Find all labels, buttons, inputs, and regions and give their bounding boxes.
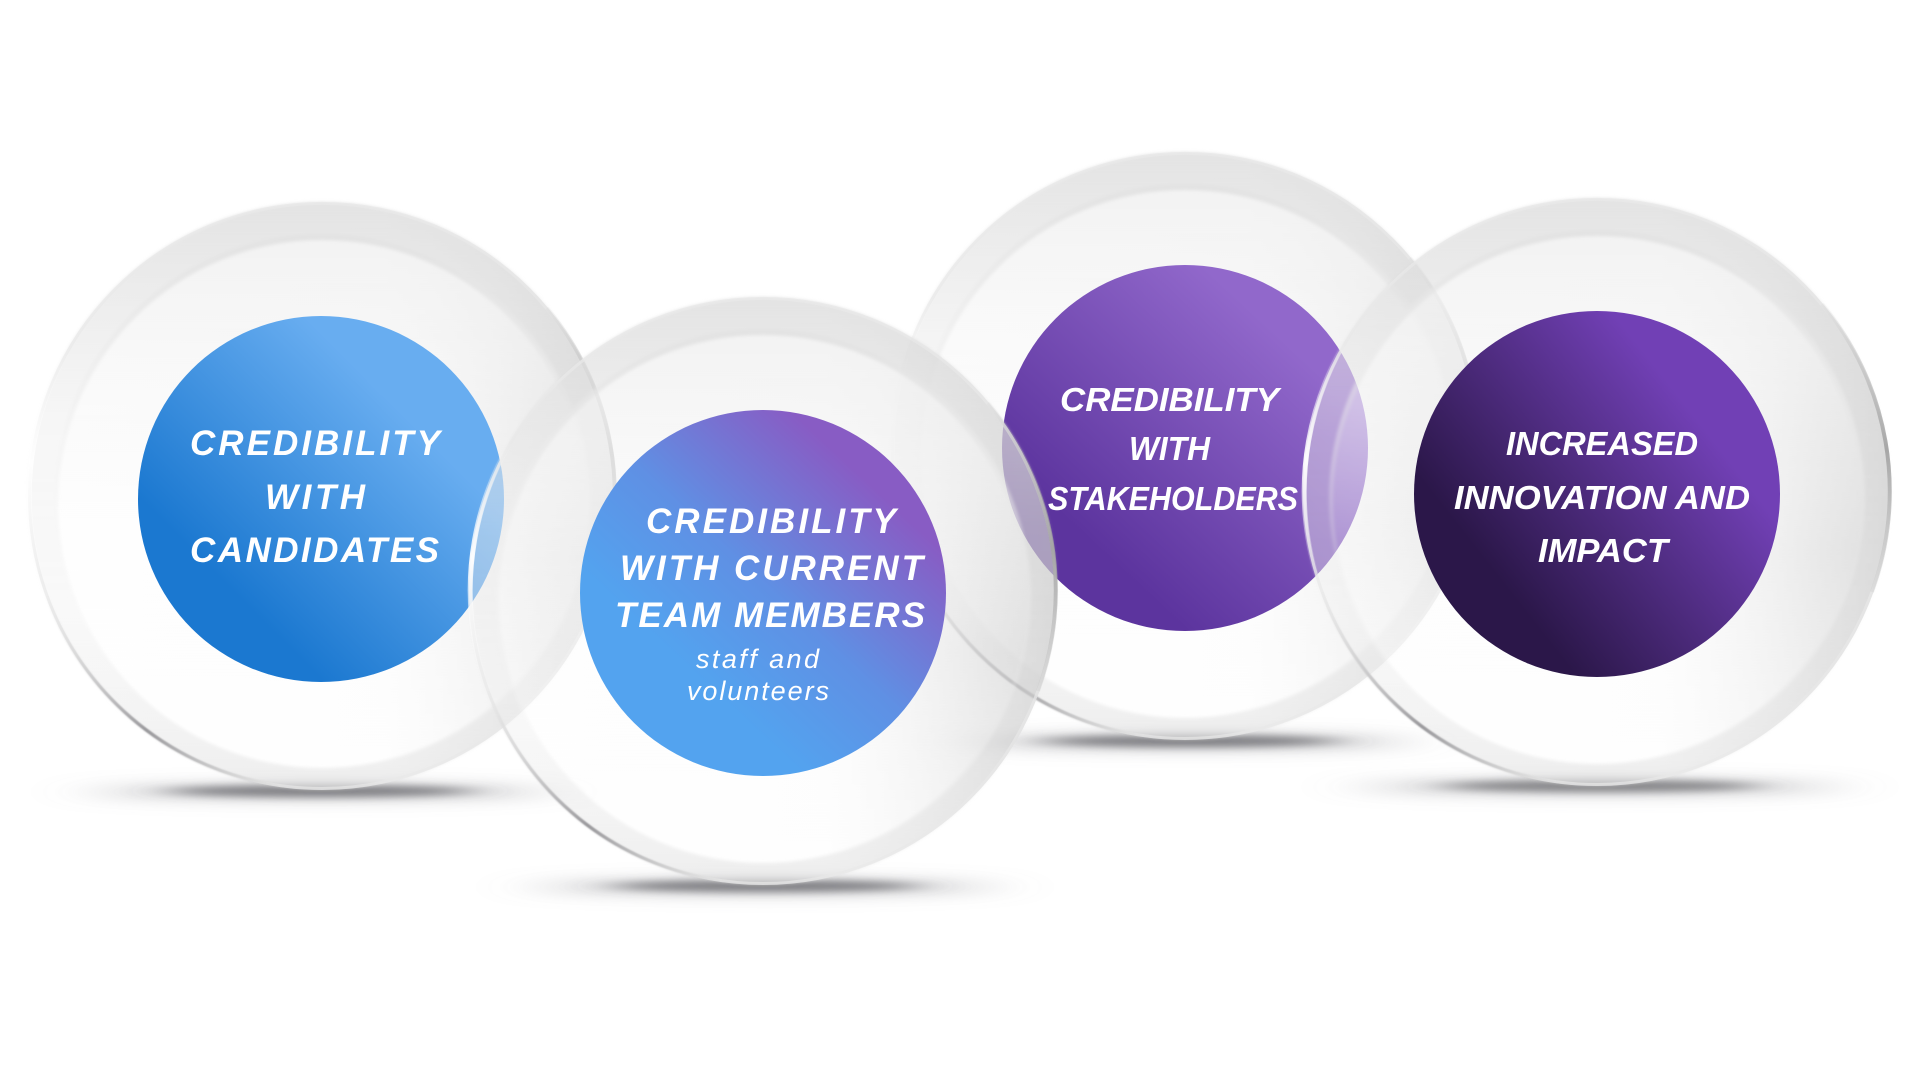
heading: credibility with stakeholders xyxy=(1048,381,1298,517)
disc: candidates xyxy=(138,316,504,682)
heading: credibility with stakeholders: WITH xyxy=(1129,430,1211,467)
shadow: bubble 3 xyxy=(965,734,1415,750)
shadow: bubble 2 xyxy=(530,879,1000,895)
heading: credibility with current team members: TEAM MEMBERS xyxy=(615,596,925,635)
bubble: credibility with current team members xyxy=(469,297,1057,885)
heading: credibility with candidates: WITH xyxy=(265,478,366,517)
glass shell: innovation xyxy=(1303,198,1891,786)
subtext: staff and volunteers: volunteers xyxy=(687,676,829,706)
subtext: staff and volunteers: staff and xyxy=(696,644,820,674)
disc: innovation xyxy=(1414,311,1780,677)
shadow: bubble 4 xyxy=(1355,779,1845,795)
glass shell: stakeholders xyxy=(891,152,1479,740)
bubble: increased innovation and impact xyxy=(1303,198,1891,786)
bubble: credibility with candidates xyxy=(28,202,616,790)
heading: increased innovation and impact xyxy=(1454,425,1750,569)
heading: credibility with candidates: CREDIBILITY xyxy=(190,424,443,463)
disc: team members xyxy=(580,410,946,776)
heading: credibility with current team members: WITH CURRENT xyxy=(620,549,926,588)
heading: credibility with candidates: CANDIDATES xyxy=(190,531,439,570)
bubble: credibility with stakeholders xyxy=(891,152,1479,740)
disc: stakeholders xyxy=(1002,265,1368,631)
heading: credibility with current team members: CREDIBILITY xyxy=(646,502,899,541)
heading: credibility with candidates xyxy=(190,424,443,570)
heading: credibility with stakeholders: CREDIBILITY xyxy=(1060,381,1282,418)
shadow: bubble 1 xyxy=(85,784,555,800)
heading: credibility with current team members xyxy=(615,502,926,635)
glass shell: candidates xyxy=(28,202,616,790)
heading: increased innovation and impact: INCREASED xyxy=(1506,425,1698,462)
glass shell: team members xyxy=(469,297,1057,885)
heading: increased innovation and impact: INNOVATION AND xyxy=(1454,479,1750,516)
heading: credibility with stakeholders: STAKEHOLDERS xyxy=(1048,480,1298,517)
subtext: staff and volunteers xyxy=(687,644,829,706)
heading: increased innovation and impact: IMPACT xyxy=(1538,532,1671,569)
